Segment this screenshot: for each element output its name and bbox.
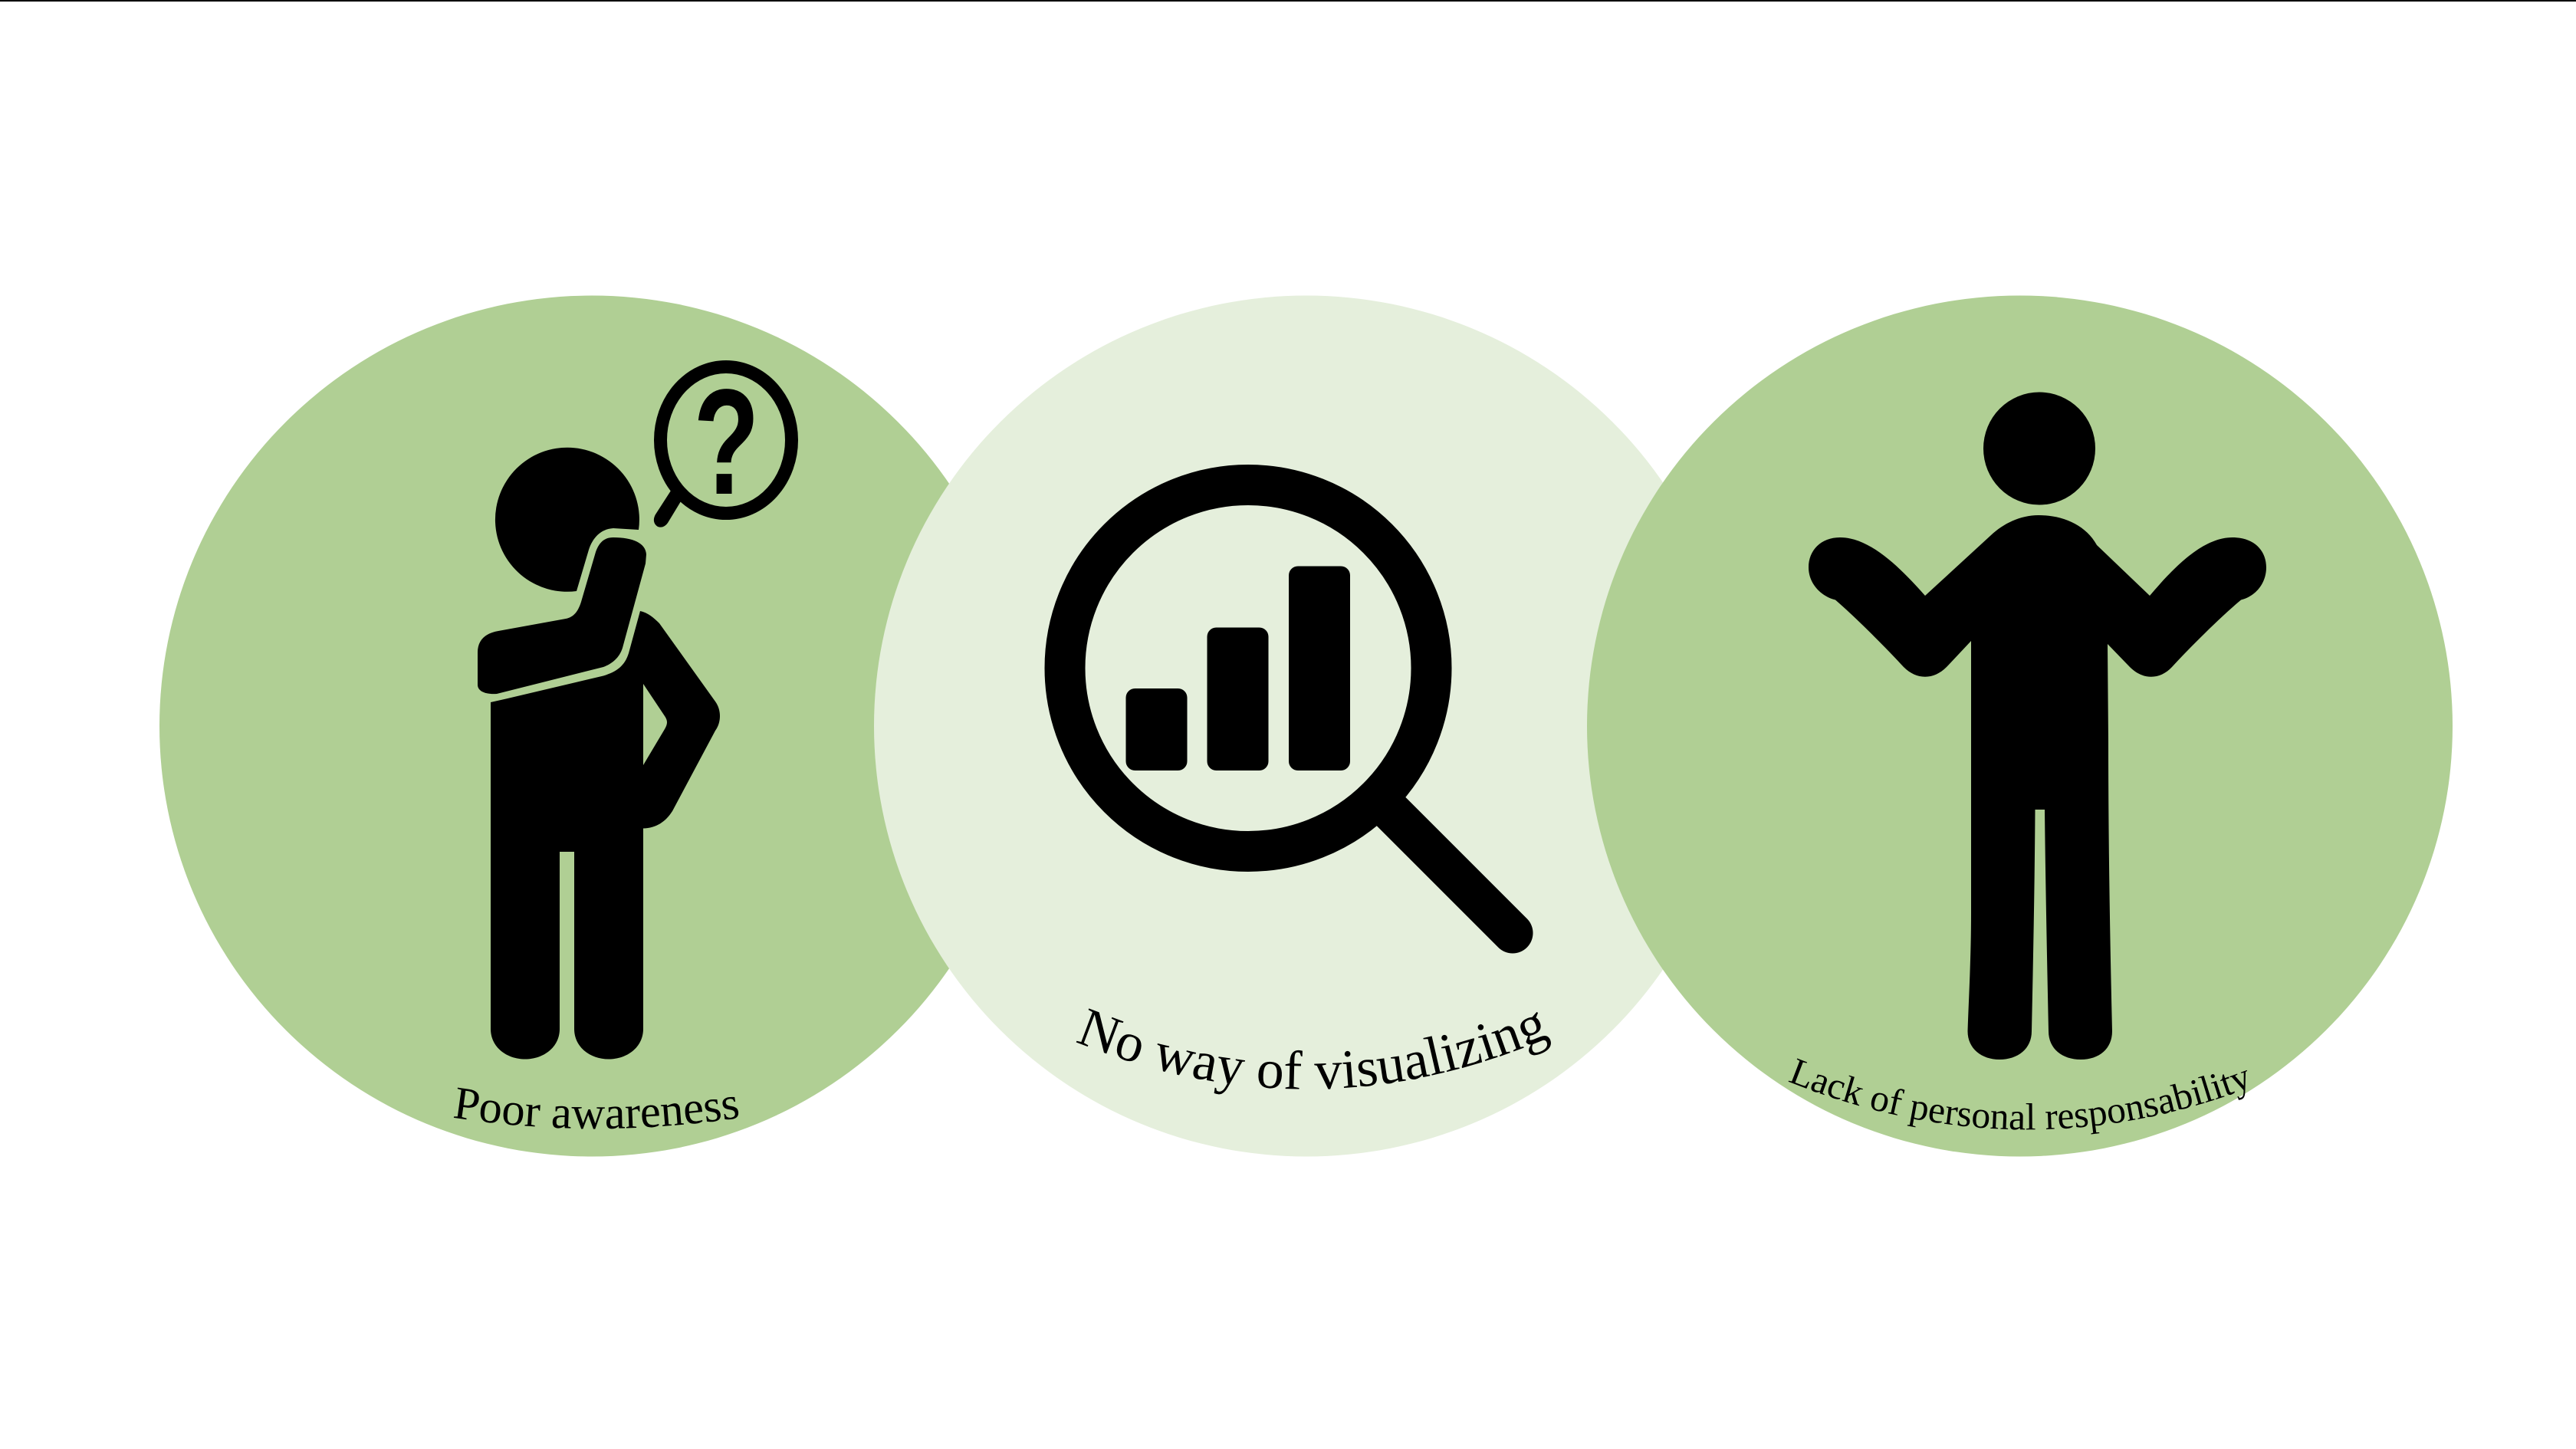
icon: question speech bubble	[654, 358, 791, 527]
circle: right green	[1587, 296, 2453, 1156]
panel: poor awareness	[159, 296, 1024, 1156]
icon: shrugging person	[1809, 393, 2266, 1060]
panel: no way of visualizing	[874, 296, 1663, 1156]
icon: thinking person	[478, 448, 720, 1060]
label: no way of visualizing: No way of visualizing	[1076, 1008, 1551, 1095]
icon: magnifier with bar chart	[1065, 485, 1513, 933]
circle: middle pale green	[874, 296, 1739, 1156]
circle: left green	[159, 296, 1024, 1156]
label: poor awareness: Poor awareness	[454, 1087, 739, 1129]
panel: lack of personal responsability	[1587, 296, 2453, 1156]
label: lack of personal responsability: Lack of personal responsability	[1788, 1058, 2247, 1135]
icon: question speech bubble: ?	[693, 358, 760, 526]
